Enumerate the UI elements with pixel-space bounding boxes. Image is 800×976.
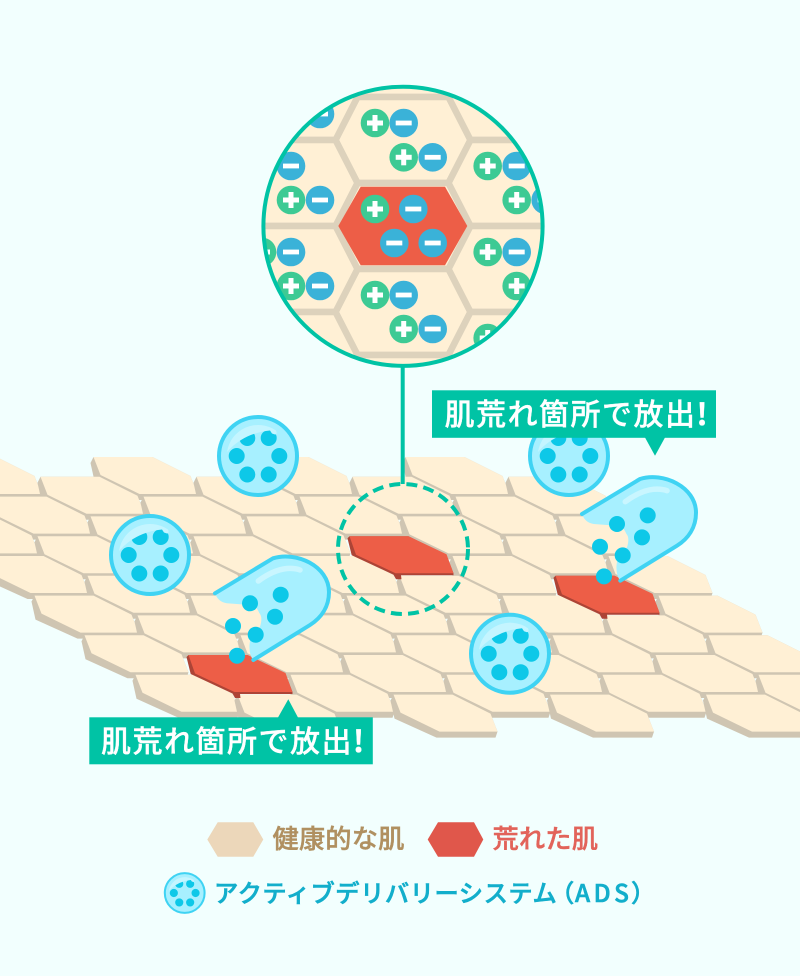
magnified skin view (261, 84, 545, 368)
legend: active delivery system: アクティブデリバリーシステム (214, 881, 557, 908)
legend: active delivery system: （ (550, 881, 575, 908)
damaged skin tile: left (186, 655, 292, 698)
callout: lower left: 肌荒れ箇所で放出! (101, 717, 366, 761)
damaged skin tile: right (554, 576, 660, 619)
ADS bubble: bottom center (471, 615, 549, 693)
opening ADS capsule: right (582, 477, 696, 584)
legend: active delivery system (165, 873, 656, 913)
ADS bubble: top center (219, 417, 297, 495)
connector line (401, 366, 405, 484)
ADS bubble: top right (530, 417, 608, 495)
skin surface: hexagonal tiles (0, 457, 800, 738)
callout: upper right: 肌荒れ箇所で放出! (444, 390, 709, 434)
callout: lower left (89, 699, 373, 764)
legend: active delivery system: ） (631, 881, 656, 908)
callout: upper right (432, 390, 716, 456)
legend: damaged skin (428, 822, 598, 857)
opening ADS capsule: left (215, 556, 329, 664)
legend: healthy skin (207, 822, 404, 857)
ADS bubble: left (111, 516, 189, 594)
legend: active delivery system: ADS (575, 874, 632, 909)
damaged skin tile: center (348, 536, 454, 579)
dashed focus circle (338, 484, 468, 614)
legend: healthy skin: 健康的な肌 (272, 824, 404, 854)
legend: damaged skin: 荒れた肌 (492, 824, 598, 854)
